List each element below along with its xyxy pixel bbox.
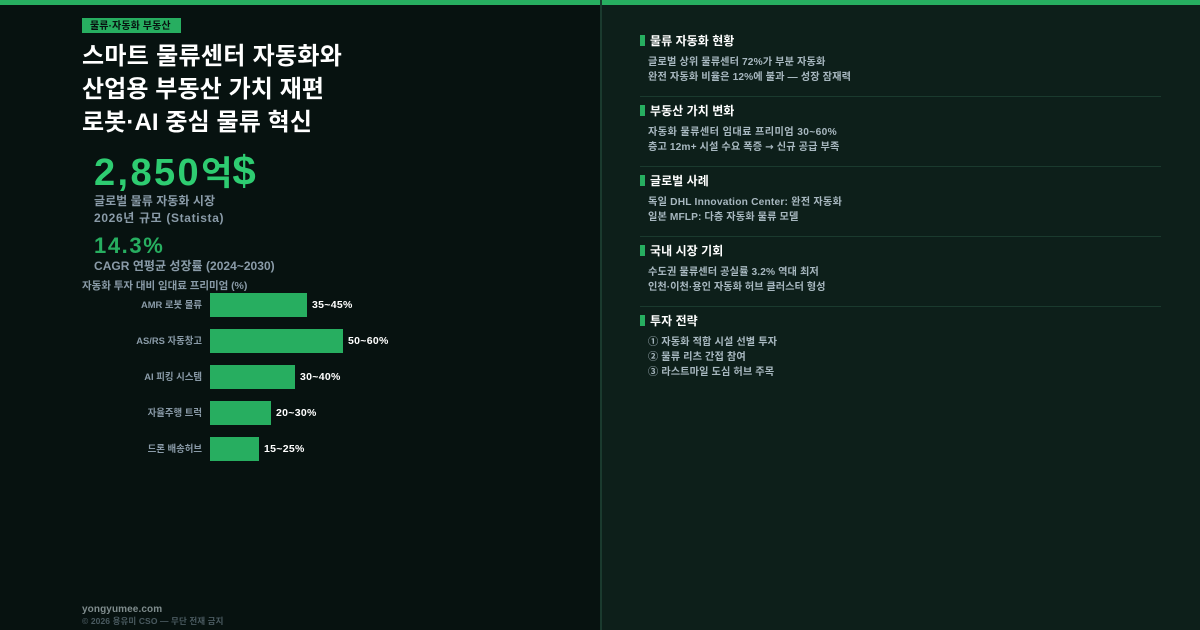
section text: 수도권 물류센터 공실률 3.2% 역대 최저 — [648, 267, 819, 278]
section text: 일본 MFLP: 다층 자동화 물류 모델 — [648, 212, 798, 223]
key stat description: 2026년 규모 (Statista) — [94, 211, 224, 225]
category badge: 물류·자동화 부동산 — [90, 21, 171, 32]
section text: 글로벌 상위 물류센터 72%가 부분 자동화 — [648, 57, 825, 68]
section text — [648, 126, 839, 153]
bar: AMR — [210, 293, 307, 317]
label: autonomous truck: 자율주행 트럭 — [148, 407, 202, 418]
section heading: 부동산 가치 변화 — [650, 104, 734, 118]
panel: right background — [600, 0, 1200, 630]
value: drone hub: 15~25% — [264, 443, 305, 455]
section: investment strategy — [640, 314, 777, 378]
section text: 층고 12m+ 시설 수요 폭증 → 신규 공급 부족 — [648, 142, 839, 153]
section text: 완전 자동화 비율은 12%에 불과 — 성장 잠재력 — [648, 72, 851, 83]
value: autonomous truck: 20~30% — [276, 407, 317, 419]
title: 로봇·AI 중심 물류 혁신 — [82, 109, 312, 136]
key stat description: 글로벌 물류 자동화 시장 — [94, 194, 215, 208]
bar: AS/RS — [210, 329, 343, 353]
bar: drone hub — [210, 437, 259, 461]
section marker — [640, 105, 645, 116]
value: AS/RS: 50~60% — [348, 335, 389, 347]
value: AI picking: 30~40% — [300, 371, 341, 383]
footer: site: yongyumee.com — [82, 604, 162, 615]
key stat: market size: 2,850억$ — [94, 147, 256, 194]
secondary stat description: CAGR 연평균 성장률 (2024~2030) — [94, 259, 275, 273]
section heading: 투자 전략 — [650, 314, 698, 328]
section heading: 물류 자동화 현황 — [650, 34, 734, 48]
chart title: 자동화 투자 대비 임대료 프리미엄 (%) — [82, 280, 247, 292]
bar chart: rent premium — [136, 293, 389, 461]
section: automation status — [640, 34, 851, 83]
bar: autonomous truck — [210, 401, 271, 425]
section text — [648, 196, 842, 223]
section: global cases — [640, 174, 842, 223]
section heading: 국내 시장 기회 — [650, 244, 723, 258]
section text — [648, 336, 777, 378]
section text — [648, 266, 825, 293]
section marker — [640, 245, 645, 256]
title: 산업용 부동산 가치 재편 — [82, 76, 324, 103]
section heading: 글로벌 사례 — [650, 174, 709, 188]
panel divider — [600, 0, 602, 630]
title — [82, 43, 342, 136]
label: AS/RS: AS/RS 자동창고 — [136, 335, 202, 346]
section text — [648, 56, 851, 83]
section text: ③ 라스트마일 도심 허브 주목 — [648, 367, 774, 378]
section text: 독일 DHL Innovation Center: 완전 자동화 — [648, 197, 842, 208]
section text: ① 자동화 적합 시설 선별 투자 — [648, 337, 777, 348]
section: property value change — [640, 104, 839, 153]
category badge — [82, 18, 181, 33]
section text: ② 물류 리츠 간접 참여 — [648, 352, 746, 363]
section marker — [640, 315, 645, 326]
footer: copyright: © 2026 용유미 CSO — 무단 전재 금지 — [82, 616, 224, 626]
section text: 자동화 물류센터 임대료 프리미엄 30~60% — [648, 127, 837, 138]
bar: AI picking — [210, 365, 295, 389]
key stat description — [94, 194, 224, 225]
label: AI picking: AI 피킹 시스템 — [144, 371, 202, 382]
label: AMR: AMR 로봇 물류 — [141, 299, 202, 310]
value: AMR: 35~45% — [312, 299, 353, 311]
section marker — [640, 175, 645, 186]
title: 스마트 물류센터 자동화와 — [82, 43, 342, 70]
section marker — [640, 35, 645, 46]
top accent bar — [0, 0, 1200, 5]
section: domestic opportunity — [640, 244, 825, 293]
section text: 인천·이천·용인 자동화 허브 클러스터 형성 — [648, 282, 825, 293]
label: drone hub: 드론 배송허브 — [148, 443, 202, 454]
secondary stat: CAGR: 14.3% — [94, 233, 164, 258]
